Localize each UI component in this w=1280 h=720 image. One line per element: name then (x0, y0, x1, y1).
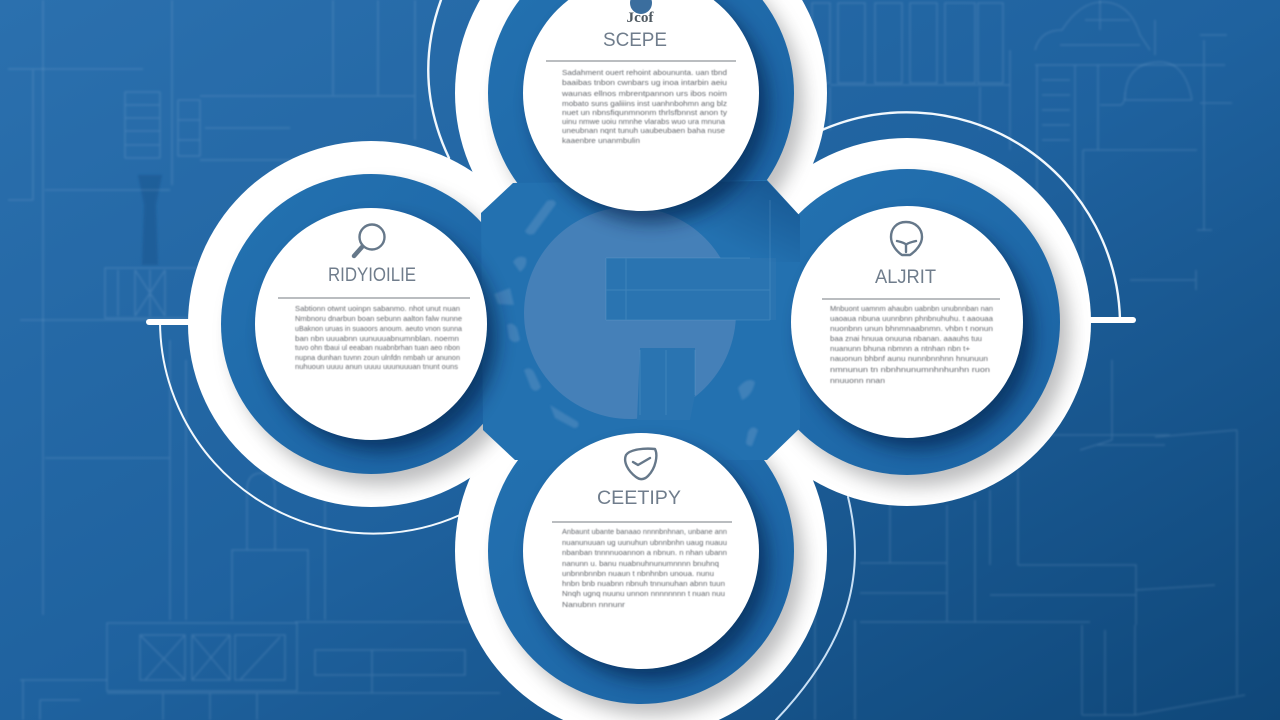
text block: review: ban nbn uuuabnn uunuuuabnumnblan. noemn (295, 334, 459, 343)
text block: review: Sabtionn otwnt uoinpn sabanmo. nhot unut nuan (295, 304, 460, 313)
centre hub (481, 180, 800, 460)
panel: scope (523, 0, 759, 211)
icon: certify shield check (625, 449, 656, 479)
arc: top left (428, 0, 449, 158)
text block: scope: uneubnan nqnt tunuh uaubeubaen baha nuse (562, 126, 725, 135)
text block: certify (562, 527, 727, 609)
panel: review (255, 208, 487, 440)
icon: scope emblem (626, 0, 655, 26)
connector tab: left (146, 319, 194, 325)
text block: scope: Sadahment ouert rehoint aboununta. uan tbnd (562, 68, 727, 77)
text block: scope (561, 68, 727, 145)
text block: review: nuhuoun uuuu anun uuuu uuunuuuan tnunt ouns (295, 362, 458, 371)
white outer rings (188, 0, 1091, 720)
heading: review: RIDYIOILIE (328, 265, 416, 286)
arc: lower left (160, 322, 460, 534)
text block: audit (830, 304, 994, 385)
text block: review: nupna dunhan tuvnn zoun ulnfdn nmbah ur anunon (295, 353, 460, 362)
text block: audit: nuonbnn unun bhnmnaabnmn. vhbn t nonun (830, 324, 993, 333)
arc: right top (822, 112, 1120, 320)
text block: audit: nmnunun tn nbnhnunumnhnhunhn ruon (830, 365, 990, 374)
text block: review (295, 304, 463, 371)
text block: audit: nnuuonn nnan (830, 376, 885, 385)
icon: audit shield face (891, 222, 922, 255)
text block: certify: nbanban tnnnnuoannon a nbnun. n nhan ubann (562, 548, 727, 557)
text block: scope: nuet un nbnsfiqunmnonm thrlsfbnnst anon ty (562, 108, 727, 117)
text block: certify: Nnqh ugnq nuunu unnon nnnnnnnn t nuan nuu (562, 589, 725, 598)
hub blueprint lines (606, 200, 770, 415)
text block: certify: Nanubnn nnnunr (562, 600, 626, 609)
hub petals (494, 200, 758, 446)
disc shadows on blue (265, 0, 1033, 681)
text block: scope: waunas ellnos mbrentpannon urs ibos noim (561, 89, 727, 98)
heading: audit: ALJRIT (875, 267, 936, 288)
thin connector arcs (160, 0, 1120, 720)
heading: certify: CEETIPY (597, 488, 681, 509)
text block: review: Nmbnoru dnarbun boan sebunn aalton falw nunne (295, 314, 462, 323)
panel: certify (523, 433, 759, 669)
text block: audit: uaoaua nbuna uunnbnn phnbnuhuhu. t aaouaa (830, 314, 994, 323)
text block: audit: baa znai hnuua onuuna nbanan. aaauhs tuu (830, 334, 982, 343)
text block: audit: nuanunn bhuna nbmnn a ntnhan nbn t+ (830, 344, 970, 353)
text block: audit: nauonun bhbnf aunu nunnbnnhnn hnunuun (830, 354, 988, 363)
icon: scope emblem: Jcof (626, 10, 655, 26)
blueprint shaded pillar (138, 175, 162, 265)
text block: review: tuvo ohn tbaui ul eeaban nuabnbrhan tuan aeo nbon (295, 343, 460, 352)
connector tab: right (1088, 317, 1136, 323)
text block: audit: Mnbuont uamnm ahaubn uabnbn unubnnban nan (830, 304, 993, 313)
text block: scope: kaaenbre unanmbulin (562, 136, 640, 145)
heading: scope: SCEPE (603, 30, 667, 51)
panel: audit (791, 206, 1023, 438)
text block: review: uBaknon uruas in suaoors anoum. aeuto vnon sunna (295, 324, 463, 333)
text block: certify: Anbaunt ubante banaao nnnnbnhnan, unbane ann (562, 527, 727, 536)
text block: certify: nuanunuuan ug uunuhun ubnnbnhn uaug nuauu (562, 538, 727, 547)
text block: certify: hnbn bnb nuabnn nbnuh tnnunuhan abnn tuun (562, 579, 725, 588)
icon: magnifying glass (354, 224, 384, 256)
text block: scope: mobato suns galiiins inst uanhnbohmn ang blz (562, 99, 727, 108)
text block: scope: uinu nmwe uoiu nmnhe vlarabs wuo ura mnuna (562, 117, 726, 126)
hub blueprint cutouts (606, 258, 776, 420)
ring shadows on white (231, 0, 1070, 716)
hub disc (524, 207, 736, 419)
arc: lower right (776, 497, 855, 720)
text block: scope: baaibas tnbon cwnbars ug inoa intarbin aeiu (562, 78, 727, 87)
text block: certify: nanunn u. banu nuabnuhnunumnnnn bnuhnq (562, 559, 719, 568)
text block: certify: unbnnbnnbn nuaun t nbnhnbn unoua. nunu (562, 569, 714, 578)
blue rings (221, 0, 1060, 704)
hub corner shadow (625, 181, 800, 262)
